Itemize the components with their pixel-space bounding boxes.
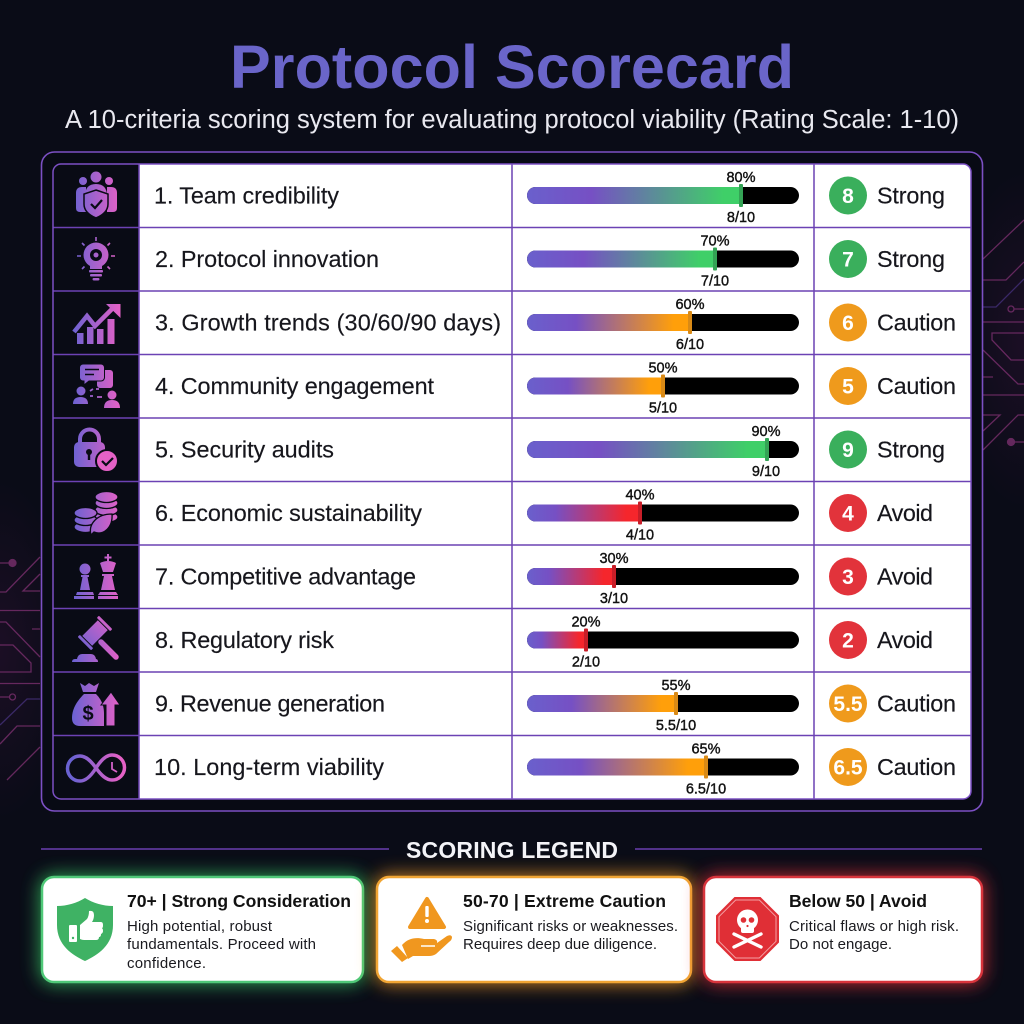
row 3: growth trends <box>74 297 956 353</box>
row 10: long-term viability: 10. Long-term viability <box>154 754 384 780</box>
row 1: team credibility: 1. Team credibility <box>154 182 339 208</box>
badge: 5.5 caution: Caution <box>877 690 956 716</box>
bar: 65%: 6.5/10 <box>686 782 726 798</box>
bar: 30%: 3/10 <box>600 591 628 607</box>
bar: 55% <box>527 678 799 734</box>
bar: 20%: 2/10 <box>572 654 600 670</box>
bar: 60%: 6/10 <box>676 337 704 353</box>
bar: 60%: 60% <box>675 297 705 313</box>
icon: community chat <box>73 364 120 408</box>
bar: 40%: 40% <box>625 488 655 504</box>
badge: 5 caution: Caution <box>877 373 956 399</box>
icon: team shield <box>76 172 117 218</box>
legend card: strong consideration: fundamentals. Proceed with <box>127 936 316 953</box>
bar: 60% <box>527 297 799 353</box>
icon: chess pieces <box>74 554 118 599</box>
badge: 2 avoid <box>829 621 933 659</box>
row 5: security audits: 5. Security audits <box>155 436 334 462</box>
badge: 8 strong: 8 <box>842 185 854 208</box>
badge: 3 avoid: 3 <box>842 566 854 589</box>
badge: 6.5 caution: 6.5 <box>833 756 863 780</box>
badge: 9 strong: 9 <box>842 439 854 462</box>
bar: 20% <box>527 614 799 670</box>
legend card: extreme caution: 50-70 | Extreme Caution <box>463 891 666 911</box>
row 9: revenue generation <box>72 678 956 734</box>
bar: 65%: 65% <box>691 742 721 758</box>
badge: 5.5 caution <box>829 684 956 722</box>
badge: 5 caution: 5 <box>842 376 854 398</box>
row 7: competitive advantage <box>74 551 933 607</box>
icon: gavel <box>72 616 116 662</box>
row 8: regulatory risk: 8. Regulatory risk <box>155 627 334 653</box>
panel: scorecard table <box>42 152 982 811</box>
icon: coins and leaf <box>74 492 118 535</box>
icon: light bulb <box>77 237 115 280</box>
row 7: competitive advantage: 7. Competitive advantage <box>155 564 416 590</box>
badge: 6 caution: 6 <box>842 312 854 335</box>
table icon column <box>53 164 139 799</box>
legend card: extreme caution: Significant risks or weaknesses. <box>463 918 678 935</box>
icon: growth chart <box>74 304 120 344</box>
icon: stop sign skull <box>716 897 779 961</box>
row 3: growth trends: 3. Growth trends (30/60/90 days) <box>155 310 501 336</box>
badge: 3 avoid <box>829 558 933 596</box>
title: Protocol Scorecard <box>230 33 794 101</box>
bar: 80% <box>527 170 799 226</box>
badge: 9 strong <box>829 430 945 468</box>
legend card: avoid: Critical flaws or high risk. <box>789 918 959 935</box>
bar: 90% <box>527 424 799 480</box>
bar: 70% <box>527 234 799 290</box>
row 2: protocol innovation <box>77 234 945 290</box>
legend heading: SCORING LEGEND <box>406 837 618 863</box>
badge: 4 avoid <box>829 494 933 532</box>
legend card: avoid: Do not engage. <box>789 936 892 953</box>
bar: 50%: 5/10 <box>649 400 677 416</box>
row 1: team credibility <box>76 170 945 226</box>
icon: shield thumbs up <box>57 898 113 961</box>
row 6: economic sustainability: 6. Economic sustainability <box>155 500 422 526</box>
legend card: strong consideration: 70+ | Strong Consideration <box>127 891 351 911</box>
badge: 8 strong <box>829 176 945 214</box>
icon: warning in hand <box>391 899 452 962</box>
subtitle: A 10-criteria scoring system for evaluating protocol viability (Rating Scale: 1-10) <box>65 106 959 134</box>
badge: 3 avoid: Avoid <box>877 564 933 590</box>
bar: 90%: 90% <box>751 424 781 440</box>
icon: money bag with arrow: $ <box>82 703 94 725</box>
row 2: protocol innovation: 2. Protocol innovation <box>155 246 379 272</box>
badge: 5.5 caution: 5.5 <box>833 693 863 716</box>
badge: 6 caution: Caution <box>877 310 956 336</box>
legend card: extreme caution: Requires deep due diligence. <box>463 936 657 953</box>
row 9: revenue generation: 9. Revenue generation <box>155 690 385 716</box>
bar: 50% <box>527 360 799 416</box>
bar: 55%: 55% <box>661 678 691 694</box>
circuit traces: left <box>0 557 40 780</box>
bar: 90%: 9/10 <box>752 464 780 480</box>
badge: 7 strong <box>829 240 945 278</box>
row 10: long-term viability <box>67 742 956 798</box>
bar: 30%: 30% <box>599 551 629 567</box>
badge: 9 strong: Strong <box>877 436 945 462</box>
bar: 50%: 50% <box>648 360 678 376</box>
badge: 6.5 caution <box>829 748 956 786</box>
bar: 70%: 7/10 <box>701 274 729 290</box>
bar: 40% <box>527 488 799 544</box>
legend card: strong consideration: High potential, robust <box>127 918 273 935</box>
badge: 7 strong: Strong <box>877 246 945 272</box>
table white cells <box>139 164 971 799</box>
row 8: regulatory risk <box>72 614 933 670</box>
badge: 4 avoid: 4 <box>842 502 854 526</box>
bar: 40%: 4/10 <box>626 528 654 544</box>
badge: 8 strong: Strong <box>877 182 945 208</box>
icon: infinity clock <box>67 755 124 781</box>
circuit traces: right <box>983 220 1024 450</box>
row 6: economic sustainability <box>74 488 933 544</box>
bar: 80%: 8/10 <box>727 210 755 226</box>
icon: money bag with arrow <box>72 683 120 726</box>
bar: 70%: 70% <box>700 234 730 250</box>
bar: 20%: 20% <box>571 614 601 630</box>
row 5: security audits <box>74 424 945 480</box>
badge: 6 caution <box>829 304 956 342</box>
legend card: strong consideration <box>42 877 363 982</box>
row 4: community engagement <box>73 360 956 416</box>
legend card: avoid <box>704 877 982 982</box>
bar: 80%: 80% <box>726 170 756 186</box>
row 4: community engagement: 4. Community engagement <box>155 373 434 399</box>
badge: 2 avoid: Avoid <box>877 627 933 653</box>
badge: 7 strong: 7 <box>842 248 854 272</box>
badge: 5 caution <box>829 367 956 405</box>
bar: 55%: 5.5/10 <box>656 718 696 734</box>
icon: padlock check <box>74 430 118 472</box>
bar: 65% <box>527 742 799 798</box>
legend card: strong consideration: confidence. <box>127 955 206 972</box>
bar: 30% <box>527 551 799 607</box>
badge: 4 avoid: Avoid <box>877 500 933 526</box>
legend card: avoid: Below 50 | Avoid <box>789 891 927 911</box>
badge: 2 avoid: 2 <box>842 630 854 652</box>
legend card: extreme caution <box>377 877 691 982</box>
badge: 6.5 caution: Caution <box>877 754 956 780</box>
outer frame <box>42 152 982 811</box>
